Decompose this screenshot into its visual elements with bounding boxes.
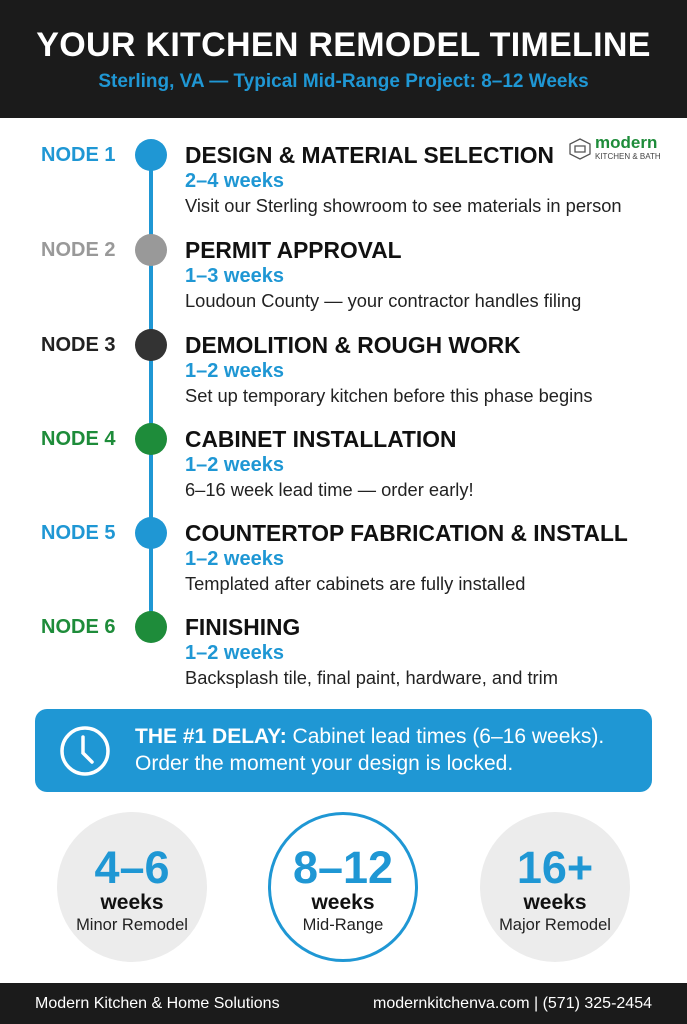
node 2: 1–3 weeks xyxy=(185,265,284,287)
stat: minor: 4–6 xyxy=(94,842,170,893)
node 4: NODE 4 xyxy=(41,428,115,450)
stat: minor xyxy=(57,812,207,962)
node 3 xyxy=(41,329,593,406)
node 1: Visit our Sterling showroom to see materials in person xyxy=(185,195,622,216)
node 6: Backsplash tile, final paint, hardware, and trim xyxy=(185,667,558,688)
stat: major: Major Remodel xyxy=(499,916,611,934)
node 3: NODE 3 xyxy=(41,334,115,356)
node 2: Loudoun County — your contractor handles filing xyxy=(185,290,581,311)
stat: minor: weeks xyxy=(100,891,164,914)
node 4: 6–16 week lead time — order early! xyxy=(185,479,474,500)
node 2 xyxy=(41,234,581,311)
callout: THE #1 DELAY: Cabinet lead times (6–16 weeks). xyxy=(135,725,604,748)
node 3: Set up temporary kitchen before this phase begins xyxy=(185,385,593,406)
node 5: 1–2 weeks xyxy=(185,548,284,570)
icon: clock xyxy=(60,726,110,776)
stat: mid-range xyxy=(268,812,418,962)
node 6: 1–2 weeks xyxy=(185,642,284,664)
logo xyxy=(569,133,661,161)
node 6: NODE 6 xyxy=(41,616,115,638)
node 4: CABINET INSTALLATION xyxy=(185,426,456,452)
node 1: NODE 1 xyxy=(41,144,115,166)
node 5: COUNTERTOP FABRICATION & INSTALL xyxy=(185,520,628,546)
node 4 xyxy=(41,423,474,500)
subtitle: Sterling, VA — Typical Mid-Range Project: 8–12 Weeks xyxy=(98,71,589,92)
node 6: FINISHING xyxy=(185,614,300,640)
node 4: 1–2 weeks xyxy=(185,454,284,476)
footer: Modern Kitchen & Home Solutions xyxy=(35,995,280,1012)
footer xyxy=(0,983,687,1024)
header xyxy=(0,0,687,118)
stat: mid-range: weeks xyxy=(311,891,375,914)
timeline line xyxy=(149,154,153,628)
node 3: 1–2 weeks xyxy=(185,360,284,382)
callout xyxy=(35,709,652,792)
node 6 xyxy=(41,611,558,688)
stat: mid-range: Mid-Range xyxy=(303,916,383,934)
logo: KITCHEN & BATH xyxy=(595,152,661,161)
stat: major xyxy=(480,812,630,962)
node 1: DESIGN & MATERIAL SELECTION xyxy=(185,142,554,168)
stat: minor: Minor Remodel xyxy=(76,916,188,934)
node 3: DEMOLITION & ROUGH WORK xyxy=(185,332,521,358)
node 5: NODE 5 xyxy=(41,522,115,544)
node 5: Templated after cabinets are fully installed xyxy=(185,573,525,594)
node 5 xyxy=(41,517,628,594)
stat: mid-range: 8–12 xyxy=(293,842,393,893)
callout: Order the moment your design is locked. xyxy=(135,752,513,775)
logo: modern xyxy=(595,133,657,152)
node 1: 2–4 weeks xyxy=(185,170,284,192)
stat: major: 16+ xyxy=(517,842,593,893)
stat: major: weeks xyxy=(523,891,587,914)
footer: modernkitchenva.com | (571) 325-2454 xyxy=(373,995,652,1012)
node 2: NODE 2 xyxy=(41,239,115,261)
node 2: PERMIT APPROVAL xyxy=(185,237,402,263)
node 1 xyxy=(41,139,622,216)
title: YOUR KITCHEN REMODEL TIMELINE xyxy=(36,26,651,64)
